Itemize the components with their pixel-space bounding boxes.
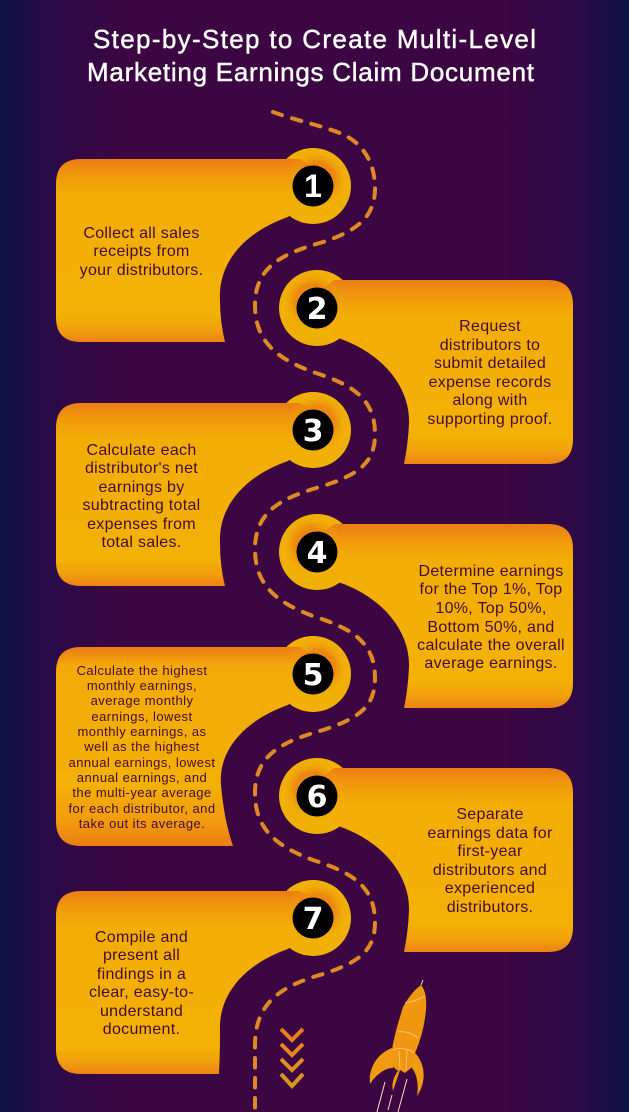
text: step 5: annual earnings, lowest <box>69 755 215 770</box>
text: step 3: subtracting total <box>82 497 201 514</box>
text: step 6: earnings data for <box>427 825 553 842</box>
text: step 2: along with <box>452 392 528 409</box>
panel: step 1 <box>56 148 351 342</box>
text: step 7: understand <box>100 1003 183 1020</box>
icon: number 6 <box>296 776 338 816</box>
icon: number 4: 4 <box>307 536 327 571</box>
title: Marketing Earnings Claim Document <box>87 57 535 87</box>
text: step 6: distributors and <box>433 862 547 879</box>
icon: number 2 <box>296 288 338 328</box>
text: step 5: Calculate the highest <box>77 663 207 678</box>
text: step 6: Separate <box>456 806 524 823</box>
text: step 4: average earnings. <box>424 655 558 672</box>
text: step 4: 10%, Top 50%, <box>435 600 547 617</box>
text: step 4: Determine earnings <box>418 563 564 580</box>
text: step 2: submit detailed <box>434 355 546 372</box>
panel: step 2 <box>279 270 573 464</box>
icon: rocket <box>370 980 426 1112</box>
title: Step-by-Step to Create Multi-Level <box>93 24 536 54</box>
text: step 5: annual earnings, and <box>77 770 207 785</box>
panel: step 7 <box>56 880 351 1074</box>
dashed road path <box>255 112 375 1112</box>
text: step 2: supporting proof. <box>427 411 553 428</box>
text: step 1: receipts from <box>93 243 190 260</box>
panel: step 5 <box>56 636 351 846</box>
icon: number 3 <box>292 410 334 450</box>
text: step 2: distributors to <box>440 337 540 354</box>
text: step 7: findings in a <box>97 966 186 983</box>
text: step 5: average monthly <box>91 693 193 708</box>
icon: number 7: 7 <box>303 902 323 937</box>
text: step 7: clear, easy-to- <box>89 984 194 1001</box>
text: step 5: for each distributor, and <box>68 801 216 816</box>
text: step 5: monthly earnings, as <box>78 724 207 739</box>
text: step 2: expense records <box>429 374 551 391</box>
text: step 3: expenses from <box>87 516 196 533</box>
text: step 4: Bottom 50%, and <box>427 619 555 636</box>
icon: number 5 <box>292 654 334 694</box>
icon: number 5: 5 <box>303 658 323 693</box>
text: step 5: well as the highest <box>83 739 200 754</box>
text: step 3: distributor's net <box>85 460 198 477</box>
icon: number 1 <box>292 166 334 206</box>
icon: down chevrons <box>281 1029 303 1086</box>
text: step 1: your distributors. <box>80 262 203 279</box>
text: step 6: first-year <box>457 843 523 860</box>
text: step 3: earnings by <box>98 479 185 496</box>
icon: number 1: 1 <box>304 168 322 204</box>
text: step 1: Collect all sales <box>83 225 200 242</box>
text: step 5: take out its average. <box>79 816 205 831</box>
text: step 5: earnings, lowest <box>91 709 193 724</box>
icon: number 6: 6 <box>307 780 327 815</box>
text: step 3: Calculate each <box>86 442 197 459</box>
text: step 7: Compile and <box>95 929 188 946</box>
panel: step 3 <box>56 392 351 586</box>
text: step 3: total sales. <box>101 534 182 551</box>
text: step 7: present all <box>103 947 180 964</box>
icon: number 3: 3 <box>303 414 323 449</box>
panel: step 4 <box>279 514 573 708</box>
panel: step 6 <box>279 758 573 952</box>
text: step 2: Request <box>459 318 521 335</box>
icon: number 4 <box>296 532 338 572</box>
icon: number 2: 2 <box>307 292 327 327</box>
text: step 7: document. <box>103 1021 180 1038</box>
text: step 4: calculate the overall <box>417 637 565 654</box>
text: step 5: the multi-year average <box>72 785 212 800</box>
title <box>87 24 536 87</box>
text: step 6: distributors. <box>447 899 533 916</box>
text: step 4: for the Top 1%, Top <box>420 581 562 598</box>
text: step 5: monthly earnings, <box>87 678 197 693</box>
icon: number 7 <box>292 898 334 938</box>
text: step 6: experienced <box>445 880 535 897</box>
